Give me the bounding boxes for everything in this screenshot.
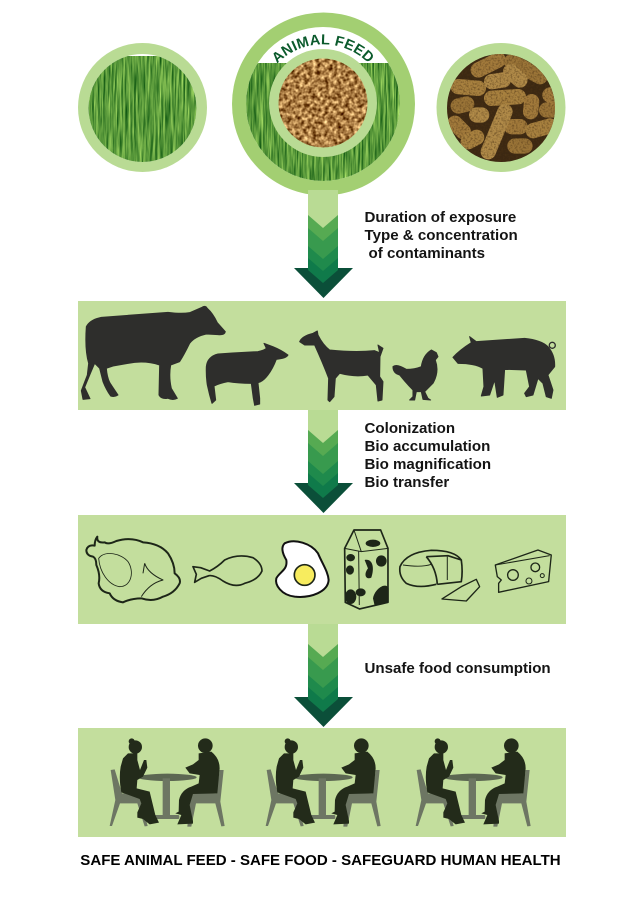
icon: grass circle — [78, 43, 207, 172]
panel: people eating — [78, 728, 566, 837]
arrow: feed to animals — [294, 190, 353, 298]
icon: swiss cheese — [495, 550, 551, 592]
text: exposure factors: Type & concentration — [364, 227, 518, 244]
text: exposure factors: Duration of exposure — [364, 209, 516, 226]
icon: chicken — [393, 350, 438, 400]
text: animal feed: ANIMAL FEED — [274, 34, 373, 64]
icon: fried egg — [276, 541, 329, 597]
text: exposure factors: of contaminants — [368, 245, 485, 262]
icon: roast chicken — [86, 537, 180, 602]
icon: diners left — [110, 738, 225, 827]
text: transfer processes: Bio accumulation — [364, 438, 490, 455]
icon: cow — [81, 306, 225, 399]
icon: cheese wheel — [400, 550, 480, 601]
icon: diners right — [416, 738, 531, 827]
panel: animals — [78, 301, 566, 410]
icon: sheep — [206, 343, 288, 405]
icon: chicken leg — [193, 556, 262, 585]
text: slogan: SAFE ANIMAL FEED - SAFE FOOD - SAFEGUARD HUMAN HEALTH — [80, 852, 561, 869]
icon: pellets circle — [436, 43, 566, 172]
icon: pig — [453, 337, 555, 398]
text: transfer processes: Bio transfer — [364, 474, 449, 491]
icon: goat — [300, 331, 383, 402]
icon: diners middle — [266, 738, 381, 827]
panel: food products — [78, 515, 566, 624]
text: exposure factors — [364, 209, 518, 262]
text: transfer processes — [364, 420, 491, 491]
text: transfer processes: Colonization — [364, 420, 455, 437]
icon: animal feed circle — [232, 12, 415, 194]
text: unsafe consumption: Unsafe food consumption — [364, 660, 551, 677]
arrow: animals to food — [294, 410, 353, 513]
text: transfer processes: Bio magnification — [364, 456, 491, 473]
icon: milk carton — [345, 530, 389, 609]
arrow: food to people — [294, 624, 353, 727]
